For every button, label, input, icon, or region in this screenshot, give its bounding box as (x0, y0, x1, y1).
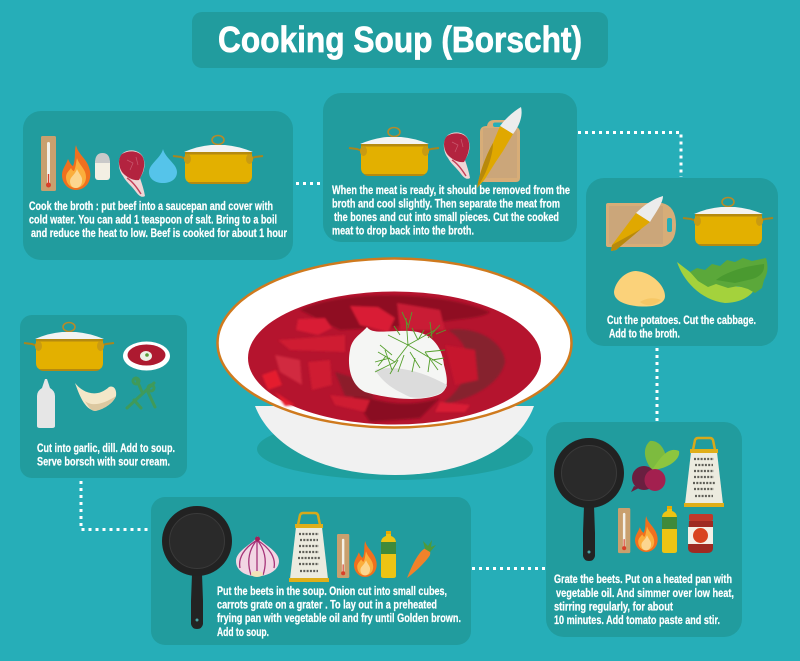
icon: oil bottle (381, 531, 396, 578)
icon: dill sprig (127, 378, 155, 408)
icon: grater (289, 513, 329, 582)
panel: step 1 cook the broth (23, 111, 293, 260)
text: step 3: Add to the broth. (609, 328, 680, 340)
text: step 4: vegetable oil. And simmer over low heat, (556, 588, 734, 600)
text: step 6: Cut into garlic, dill. Add to soup. (37, 443, 175, 455)
text: step 2: meat to drop back into the broth. (332, 226, 474, 238)
icon: potato (614, 271, 665, 307)
text: step 5: carrots grate on a grater . To lay out in a preheated (217, 600, 437, 612)
connector: panel 1 to panel 2 (296, 182, 323, 185)
icon: tomato paste jar (688, 514, 713, 553)
icon: garlic clove (75, 383, 116, 411)
text: step 6 (37, 443, 175, 468)
text: step 2: the bones and cut into small pieces. Cut the cooked (334, 212, 559, 224)
bowl rim (218, 258, 572, 428)
icon: carrot (407, 540, 436, 578)
icon: cutting board (480, 120, 520, 182)
panel: step 5 fry the vegetables (151, 497, 471, 645)
icon: knife (477, 107, 522, 188)
icon: salt shaker (95, 153, 110, 180)
text: step 4 (554, 574, 734, 627)
panel: step 2 remove the meat (323, 93, 577, 242)
icon: thermometer (618, 508, 630, 553)
bowl base (255, 406, 534, 475)
icon: flame (635, 516, 658, 552)
title (192, 12, 608, 68)
text: step 1 (29, 201, 287, 240)
connector: panel 2 to panel 3 (578, 132, 681, 177)
text: step 2 (332, 185, 570, 238)
icon: cabbage (677, 258, 767, 303)
icon: flame (62, 145, 90, 190)
text: step 4: stirring regularly, for about (554, 602, 673, 614)
icon: sour cream bottle (37, 379, 55, 428)
icon: red onion (236, 536, 279, 577)
icon: flame (354, 541, 377, 577)
text: step 1: and reduce the heat to low. Beef is cooked for about 1 hour (31, 228, 287, 240)
panel: step 4 grate the beets (546, 422, 742, 637)
icon: cutting board (606, 203, 676, 247)
icon: pot (173, 136, 263, 184)
icon: grater (684, 438, 724, 507)
illustration: bowl of borscht (218, 258, 572, 480)
text: step 3 (607, 315, 756, 340)
icon: thermometer (337, 534, 349, 578)
icon: frying pan (162, 506, 232, 629)
text: step 4: Grate the beets. Put on a heated pan with (554, 574, 732, 586)
icon: small soup bowl (123, 342, 170, 370)
soup (248, 292, 541, 424)
text: step 2: broth and cool slightly. Then separate the meat from (332, 198, 560, 210)
icon: frying pan (554, 438, 624, 561)
dill (375, 312, 446, 374)
icon: beef (119, 150, 145, 197)
sour cream (349, 327, 447, 399)
connector: panel 5 to panel 4 (81, 481, 150, 530)
text: step 5: frying pan with vegetable oil and fry until Golden brown. (217, 613, 461, 625)
icon: beef (444, 132, 470, 179)
text: step 1: Cook the broth : put beef into a saucepan and cover with (29, 201, 273, 213)
text: step 1: cold water. You can add 1 teaspoon of salt. Bring to a boil (29, 214, 277, 226)
text: step 5: Add to soup. (217, 627, 269, 639)
icon: thermometer (41, 136, 56, 191)
panel: step 3 potatoes and cabbage (586, 178, 778, 346)
text: step 4: 10 minutes. Add tomato paste and stir. (554, 615, 720, 627)
text: step 5 (217, 586, 461, 639)
icon: knife (611, 196, 663, 251)
text: step 2: When the meat is ready, it should be removed from the (332, 185, 570, 197)
icon: pot (24, 322, 114, 371)
connector: panel 6 to panel 5 (472, 567, 545, 570)
icon: oil bottle (662, 506, 677, 553)
bowl shadow (257, 418, 533, 480)
text: step 5: Put the beets in the soup. Onion cut into small cubes, (217, 586, 447, 598)
icon: water drop (149, 149, 177, 183)
icon: pot (683, 198, 773, 246)
connector: panel 3 to panel 6 (656, 348, 658, 421)
panel: step 6 garlic and dill (20, 315, 187, 478)
icon: beetroot (631, 441, 679, 492)
title: Cooking Soup (Borscht) (218, 19, 582, 60)
icon: pot (349, 128, 439, 176)
text: step 6: Serve borsch with sour cream. (37, 456, 170, 468)
text: step 3: Cut the potatoes. Cut the cabbage. (607, 315, 756, 327)
